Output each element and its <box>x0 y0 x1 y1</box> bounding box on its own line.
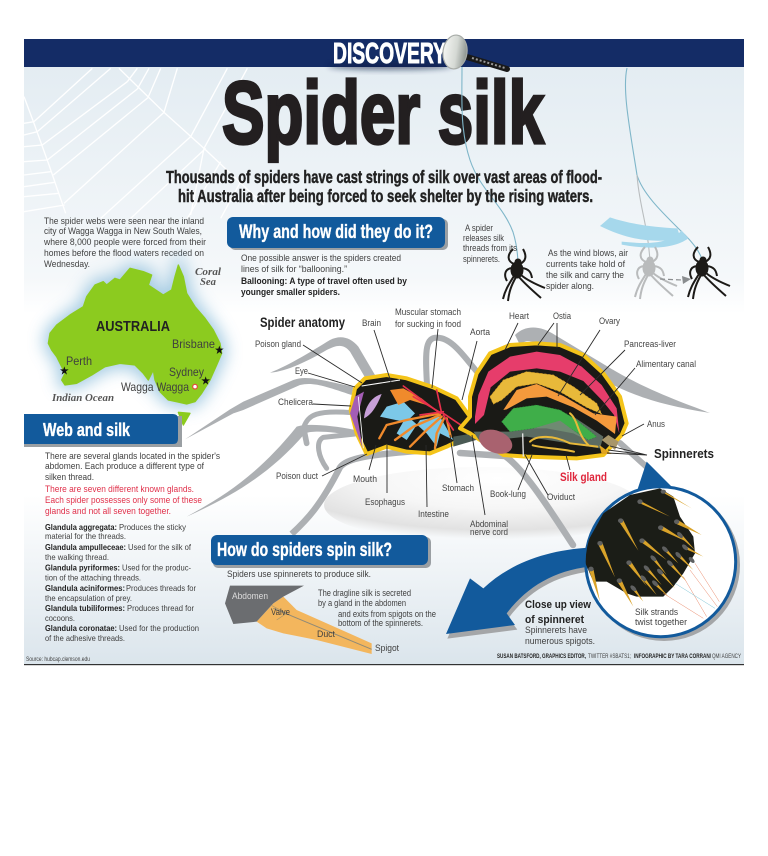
anatomy labels: Intestine <box>418 509 449 519</box>
text block: glands: There are several glands located in the spider's <box>45 451 220 462</box>
text block: gland list: Produces threads for <box>126 583 196 593</box>
text block: gland list: Glandula aciniformes: <box>45 583 125 593</box>
anatomy labels: Heart <box>509 311 529 321</box>
text block: intro: The spider webs were seen near the inland <box>44 216 204 227</box>
text block: spider releases silk <box>463 223 517 264</box>
map of Australia: Brisbane <box>172 337 215 351</box>
subtitle: Thousands of spiders have cast strings of silk over vast areas of flood- <box>166 167 602 187</box>
text block: gland list: Glandula ampulleceae: <box>45 542 126 552</box>
header band <box>24 39 744 67</box>
text: spinnerets intro: Spiders use spinnerets to produce silk. <box>227 569 371 580</box>
anatomy labels: Muscular stomach <box>395 307 461 317</box>
text block: seven glands: Each spider possesses only some of these <box>45 495 202 506</box>
cephalothorax organs <box>350 380 483 448</box>
diagram: spinneret section: Duct <box>317 629 335 640</box>
text block: spider releases silk: spinnerets. <box>463 254 500 264</box>
title: Spider silk <box>222 63 545 162</box>
text: dragline: by a gland in the abdomen <box>318 598 406 608</box>
text block: intro: Wednesday. <box>44 259 90 270</box>
text: close up view: Close up view <box>525 599 591 611</box>
anatomy labels: Esophagus <box>365 497 405 507</box>
text block: gland list: Glandula aggregata: <box>45 522 117 532</box>
diagram: spinneret section <box>225 586 399 654</box>
text block: glands: abdomen. Each produce a different type of <box>45 461 204 472</box>
green glands <box>502 405 597 440</box>
anatomy labels: Brain <box>362 318 381 328</box>
panel background <box>24 60 744 664</box>
text block: wind: the silk and carry the <box>546 270 624 281</box>
text block: gland list: Produces thread for <box>127 603 194 613</box>
text block: gland list <box>45 522 199 643</box>
text block: glands: silken thread. <box>45 472 94 483</box>
text block: spider releases silk: releases silk <box>463 233 504 243</box>
banner: how do spiders spin silk: How do spiders spin silk? <box>217 540 392 561</box>
anatomy labels <box>255 307 714 537</box>
silk glands <box>530 413 597 452</box>
anatomy labels: Book-lung <box>490 489 526 499</box>
text block: ballooning: Ballooning: A type of travel often used by <box>241 276 408 287</box>
text block: spider releases silk: threads from its <box>463 243 517 253</box>
arrow: close up <box>446 462 675 639</box>
text: silk strands <box>635 607 687 627</box>
icon: black spider <box>688 247 730 299</box>
text block: wind <box>546 248 628 292</box>
anatomy labels: Chelicera <box>278 397 313 407</box>
text block: intro <box>43 216 206 270</box>
credit: TWITTER #SBATS1; <box>588 654 631 660</box>
map of Australia: Wagga Wagga <box>121 380 189 394</box>
text block: intro: homes before the flood waters receded on <box>44 248 204 259</box>
text block: gland list: Used for the produc- <box>122 562 191 572</box>
text block: seven glands: glands and not all seven together. <box>45 506 171 517</box>
text: close up view: numerous spigots. <box>525 636 595 647</box>
banner: why and how <box>227 217 448 250</box>
text: dragline: bottom of the spinnerets. <box>338 618 423 628</box>
text block: ballooning <box>241 253 408 298</box>
credit: INFOGRAPHIC BY TARA CORRAN/ <box>634 654 711 660</box>
text block: gland list: the walking thread. <box>45 552 109 562</box>
text block: gland list: cocoons. <box>45 613 75 623</box>
text block: wind: spider along. <box>546 281 594 292</box>
text: close up view <box>525 599 595 647</box>
text block: wind: As the wind blows, air <box>548 248 628 259</box>
anatomy labels: Oviduct <box>547 492 575 502</box>
credit <box>497 654 741 660</box>
text block: gland list: material for the threads. <box>45 531 126 541</box>
text block: gland list: Glandula pyriformes: <box>45 562 120 572</box>
text: dragline: The dragline silk is secreted <box>318 588 411 598</box>
anatomy labels: Aorta <box>470 327 490 337</box>
spider legs <box>185 328 710 545</box>
text: close up view: of spinneret <box>525 614 584 626</box>
text: silk strands: Silk strands <box>635 607 678 617</box>
map of Australia: Sydney <box>169 365 204 379</box>
silk threads <box>462 67 703 266</box>
icon: magnifying glass <box>441 33 507 71</box>
anatomy labels: Pancreas-liver <box>624 339 676 349</box>
anatomy labels: Mouth <box>353 474 377 484</box>
text block: gland list: Glandula tubiliformes: <box>45 603 125 613</box>
credit: QMI AGENCY <box>712 654 741 660</box>
map of Australia: Perth <box>66 354 92 368</box>
text block: gland list: of the adhesive threads. <box>45 633 125 643</box>
text block: intro: city of Wagga Wagga in New South Wales, <box>44 226 202 237</box>
header label: Discovery <box>328 38 452 70</box>
anatomy labels: Stomach <box>442 483 474 493</box>
text block: gland list: Used for the silk of <box>128 542 192 552</box>
anatomy labels: Anus <box>647 419 665 429</box>
text block: seven glands <box>45 484 202 517</box>
map of Australia <box>48 265 224 425</box>
text block: wind: currents take hold of <box>546 259 625 270</box>
wind swoosh <box>600 217 688 248</box>
anatomy labels: Abdominal <box>470 519 508 529</box>
anatomy: thorax <box>350 375 483 454</box>
heart <box>475 352 619 433</box>
banner: why and how: Why and how did they do it? <box>239 222 433 243</box>
text block: gland list: Used for the production <box>119 623 199 633</box>
source: Source: hubcap.clemson.edu <box>26 657 90 663</box>
anatomy labels: nerve cord <box>470 527 508 537</box>
anatomy labels: for sucking in food <box>395 319 461 329</box>
map of Australia: Sea <box>200 277 216 288</box>
text block: gland list: Glandula coronatae: <box>45 623 117 633</box>
text: close up view: Spinnerets have <box>525 625 587 636</box>
subtitle <box>166 167 602 206</box>
icon: grey spider <box>635 247 677 299</box>
book lung <box>475 425 516 458</box>
anatomy labels: Eye <box>295 366 308 376</box>
diagram: spinneret section: Spigot <box>375 643 399 654</box>
map of Australia: Coral <box>195 267 221 278</box>
banner: web and silk <box>24 414 182 447</box>
icon: spider hanging <box>503 249 545 301</box>
subtitle: hit Australia after being forced to seek shelter by the rising waters. <box>178 186 593 206</box>
credit: SUSAN BATSFORD, GRAPHICS EDITOR, <box>497 654 586 660</box>
text: dragline: and exits from spigots on the <box>338 609 436 619</box>
anatomy: abdomen <box>460 343 627 458</box>
text block: gland list: the encapsulation of prey. <box>45 593 132 603</box>
anatomy labels: Ostia <box>553 311 571 321</box>
spider shadow <box>324 467 640 543</box>
map of Australia: Indian Ocean <box>51 393 114 404</box>
anatomy labels: Poison duct <box>276 471 318 481</box>
anatomy labels: Spider anatomy <box>260 314 345 330</box>
text block: intro: where 8,000 people were forced from their <box>43 237 206 248</box>
anatomy labels: Silk gland <box>560 472 607 484</box>
leader lines <box>303 323 647 515</box>
grey tissue <box>473 417 603 448</box>
pancreas-liver <box>490 372 602 414</box>
text block: spider releases silk: A spider <box>465 223 493 233</box>
anatomy labels: Ovary <box>599 316 620 326</box>
banner: how do spiders spin silk <box>211 535 431 568</box>
text block: seven glands: There are seven different known glands. <box>45 484 194 495</box>
header label: Discovery: DISCOVERY <box>333 38 446 70</box>
spinneret <box>602 435 619 450</box>
anatomy labels: Spinnerets <box>654 446 714 461</box>
diagram: spinneret section: Abdomen <box>232 591 268 602</box>
text block: ballooning: younger smaller spiders. <box>241 287 340 298</box>
text: dragline <box>318 588 436 628</box>
diagram: spinneret section: Valve <box>271 607 290 618</box>
text block: gland list: tion of the attaching threads. <box>45 572 141 582</box>
map of Australia: AUSTRALIA <box>96 318 170 335</box>
anatomy labels: Alimentary canal <box>636 359 696 369</box>
arrow: drift <box>660 276 691 284</box>
ovary <box>503 384 617 434</box>
text block: gland list: Produces the sticky <box>119 522 187 532</box>
banner: web and silk: Web and silk <box>43 420 131 440</box>
text: silk strands: twist together <box>635 617 687 627</box>
text block: ballooning: lines of silk for “ballooning.” <box>241 264 347 275</box>
close-up lens <box>584 487 740 641</box>
text block: glands <box>45 451 220 483</box>
text block: ballooning: One possible answer is the spiders created <box>241 253 401 264</box>
anatomy labels: Poison gland <box>255 339 301 349</box>
